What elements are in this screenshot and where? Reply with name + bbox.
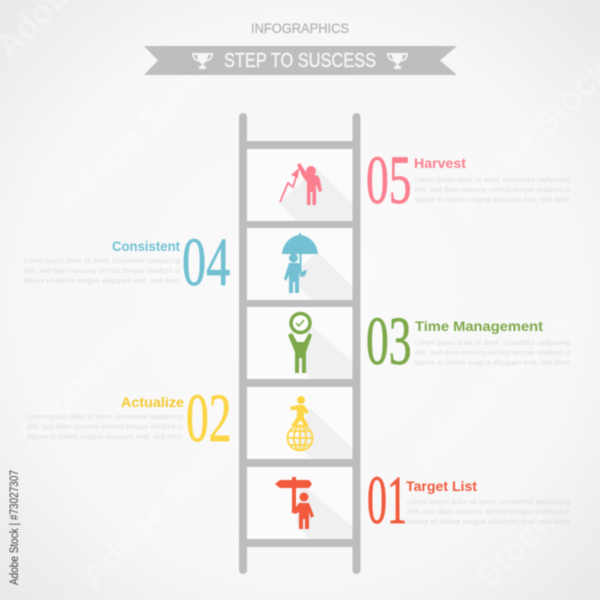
watermarks: Stock — [469, 503, 561, 596]
credit text: Adobe Stock | #73027307 — [9, 470, 21, 585]
panels — [247, 149, 353, 539]
step 01: 01 — [367, 463, 407, 539]
icon: trophy right — [387, 53, 408, 69]
step 04: 04 — [182, 224, 230, 300]
step 02: Actualize — [121, 394, 184, 410]
step 01 — [367, 463, 571, 539]
icon: trophy left — [192, 53, 213, 69]
step 01: Target List — [406, 478, 477, 494]
step 03: elitr, sed diam nonumy eirmod tempor invidunt ut — [415, 348, 571, 357]
icon: person holding clock — [288, 314, 312, 373]
step 03 — [366, 303, 571, 379]
icon: person with umbrella — [282, 233, 318, 293]
heading: infographics: INFOGRAPHICS — [251, 20, 349, 36]
long shadows — [279, 168, 353, 539]
banner: STEP TO SUSCESS — [224, 50, 376, 72]
rails and rungs — [239, 113, 360, 574]
step 04: Consistent — [112, 238, 180, 254]
step 03: 03 — [366, 303, 412, 379]
step 02: elitr, sed diam nonumy eirmod tempor invidunt ut — [27, 422, 184, 431]
step 05: 05 — [366, 142, 412, 218]
step 02: Lorem ipsum dolor sit amet, consetetur sadipscing — [27, 412, 183, 421]
step 03: Lorem ipsum dolor sit amet, consetetur sadipscing — [415, 338, 570, 347]
step 04: elitr, sed diam nonumy eirmod tempor invidunt ut — [24, 266, 181, 275]
step 04: labore et dolore magna aliquyam erat, sed diam — [24, 276, 180, 285]
step 01: labore et dolore magna aliquyam erat, sed diam — [407, 517, 570, 526]
icon: person on globe — [288, 396, 312, 450]
step 05: elitr, sed diam nonumy eirmod tempor invidunt ut — [415, 185, 571, 194]
icon: person with rising chart — [280, 163, 322, 205]
step 02: 02 — [186, 380, 232, 456]
watermarks: Adobe Stock — [404, 302, 578, 476]
icon: person with signpost — [275, 477, 314, 529]
step 02: labore et dolore magna aliquyam erat, sed diam — [27, 432, 183, 441]
watermarks: Adobe Stock — [239, 222, 413, 396]
step 01: Lorem ipsum dolor sit amet, consetetur sadipscing — [407, 497, 570, 506]
step 04 — [24, 224, 230, 300]
step 05: Lorem ipsum dolor sit amet, consetetur sadipscing — [415, 175, 570, 184]
watermarks: Adobe Stock — [74, 422, 248, 596]
step 05: labore et dolore magna aliquyam erat, sed diam — [415, 195, 570, 204]
ladder — [239, 113, 360, 574]
banner — [144, 46, 457, 75]
step 03: labore et dolore magna aliquyam erat, sed diam — [415, 358, 570, 367]
step 02 — [27, 380, 232, 456]
step 04: Lorem ipsum dolor sit amet, consetetur sadipscing — [24, 256, 180, 265]
watermarks: Adobe Stock — [9, 282, 183, 456]
step 05: Harvest — [414, 155, 466, 171]
step 01: elitr, sed diam nonumy eirmod tempor invidunt ut — [407, 507, 571, 516]
step 03: Time Management — [415, 318, 543, 334]
step 05 — [366, 142, 571, 218]
watermarks: Adobe Stock — [49, 47, 223, 221]
